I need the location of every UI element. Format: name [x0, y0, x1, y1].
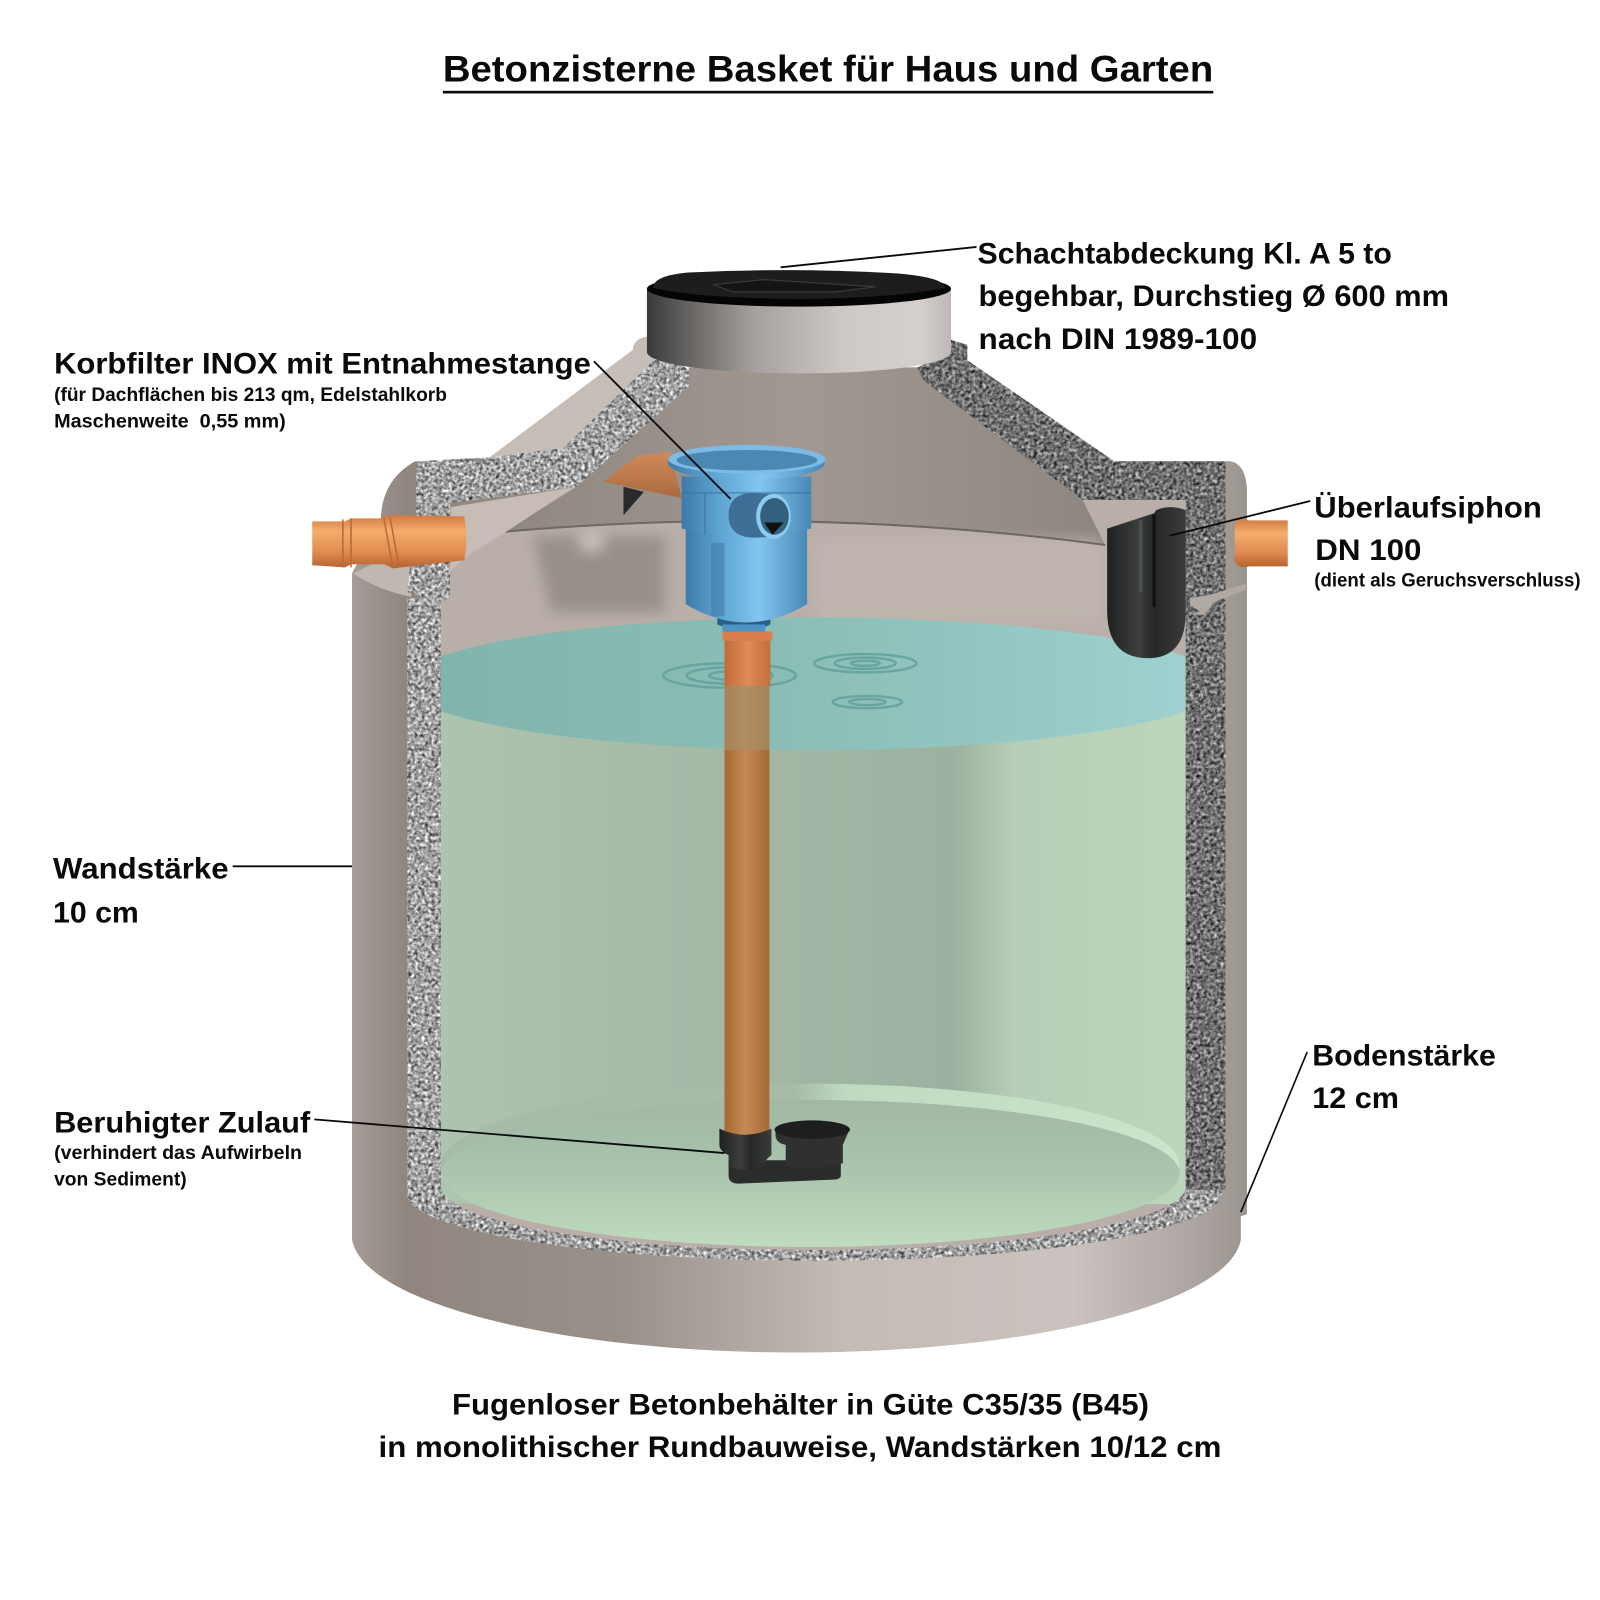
- label: overflow siphon: (dient als Geruchsverschluss): [1314, 570, 1581, 592]
- riser pipe: [722, 632, 772, 1135]
- label: basket filter: (für Dachflächen bis 213 qm, Edelstahlkorb: [54, 384, 447, 406]
- leader: manhole cover: [781, 247, 977, 267]
- manhole cover: [647, 270, 951, 307]
- outlet pipe right: [1235, 519, 1288, 567]
- shoulder underside: [450, 488, 572, 571]
- leader: floor thickness: [1241, 1052, 1307, 1212]
- cistern cutaway illustration: [312, 270, 1288, 1352]
- filter spout: [717, 612, 770, 631]
- tank interior back wall: [441, 367, 1186, 1250]
- tank floor: [441, 1100, 1180, 1247]
- inlet pipe left: [312, 515, 466, 568]
- label: floor thickness: Bodenstärke: [1312, 1039, 1496, 1072]
- leader: overflow siphon: [1169, 501, 1310, 536]
- label: manhole cover: begehbar, Durchstieg Ø 600 mm: [979, 280, 1449, 313]
- overflow siphon: [1107, 507, 1186, 658]
- leader: basket filter: [594, 361, 731, 499]
- inlet pipe behind filter: [603, 452, 682, 498]
- water ripples: [663, 654, 916, 708]
- seam line: [505, 521, 1105, 545]
- outer cone surface left: [490, 337, 666, 457]
- submerged wall: [405, 617, 1221, 1247]
- label: manhole cover: Schachtabdeckung Kl. A 5 to: [978, 237, 1392, 270]
- ledge below inlet pipe: [353, 561, 411, 597]
- label: manhole cover: nach DIN 1989-100: [979, 323, 1257, 356]
- filter upper body: [682, 477, 811, 536]
- label: overflow siphon: [1314, 491, 1581, 592]
- calming inlet fitting: [719, 1120, 850, 1184]
- label: basket filter: Maschenweite 0,55 mm): [54, 411, 286, 433]
- leader: wall thickness: [233, 865, 352, 867]
- pipe bracket: [623, 487, 644, 515]
- filter side nozzle: [729, 493, 773, 538]
- label: calming inlet: (verhindert das Aufwirbeln: [54, 1142, 302, 1164]
- label: basket filter: Korbfilter INOX mit Entnahmestange: [54, 347, 591, 380]
- label: floor thickness: 12 cm: [1312, 1082, 1399, 1115]
- concrete cut section left shoulder: [407, 353, 689, 604]
- label: overflow siphon: Überlaufsiphon: [1314, 491, 1542, 524]
- footer caption: [379, 1388, 1221, 1464]
- concrete cut section lower: [407, 598, 1222, 1261]
- basket filter: [668, 445, 826, 632]
- filter lower body: [686, 526, 807, 622]
- wall shadows: [533, 536, 1102, 622]
- shaft riser: [647, 289, 951, 373]
- footer caption: Fugenloser Betonbehälter in Güte C35/35 (B45): [452, 1388, 1149, 1421]
- footer caption: in monolithischer Rundbauweise, Wandstärken 10/12 cm: [379, 1431, 1221, 1464]
- label: wall thickness: [53, 853, 229, 929]
- label: overflow siphon: DN 100: [1315, 534, 1421, 567]
- interior cone roof: [505, 367, 1105, 545]
- label: calming inlet: von Sediment): [54, 1169, 187, 1191]
- floor lip: [800, 1084, 1180, 1168]
- label: floor thickness: [1312, 1039, 1496, 1115]
- concrete outer shell: [352, 461, 1247, 1352]
- label: wall thickness: Wandstärke: [53, 853, 229, 886]
- water surface: [405, 617, 1221, 750]
- wall joint notch right: [1190, 584, 1246, 615]
- label: calming inlet: Beruhigter Zulauf: [54, 1107, 310, 1140]
- label: manhole cover: [978, 237, 1449, 356]
- title: Betonzisterne Basket für Haus und Garten: [443, 49, 1213, 90]
- filter collar: [668, 459, 824, 480]
- concrete cut section right: [917, 340, 1226, 1190]
- label: basket filter: [54, 347, 591, 433]
- label: wall thickness: 10 cm: [53, 896, 139, 929]
- leader: calming inlet: [314, 1119, 724, 1153]
- label: calming inlet: [54, 1107, 310, 1191]
